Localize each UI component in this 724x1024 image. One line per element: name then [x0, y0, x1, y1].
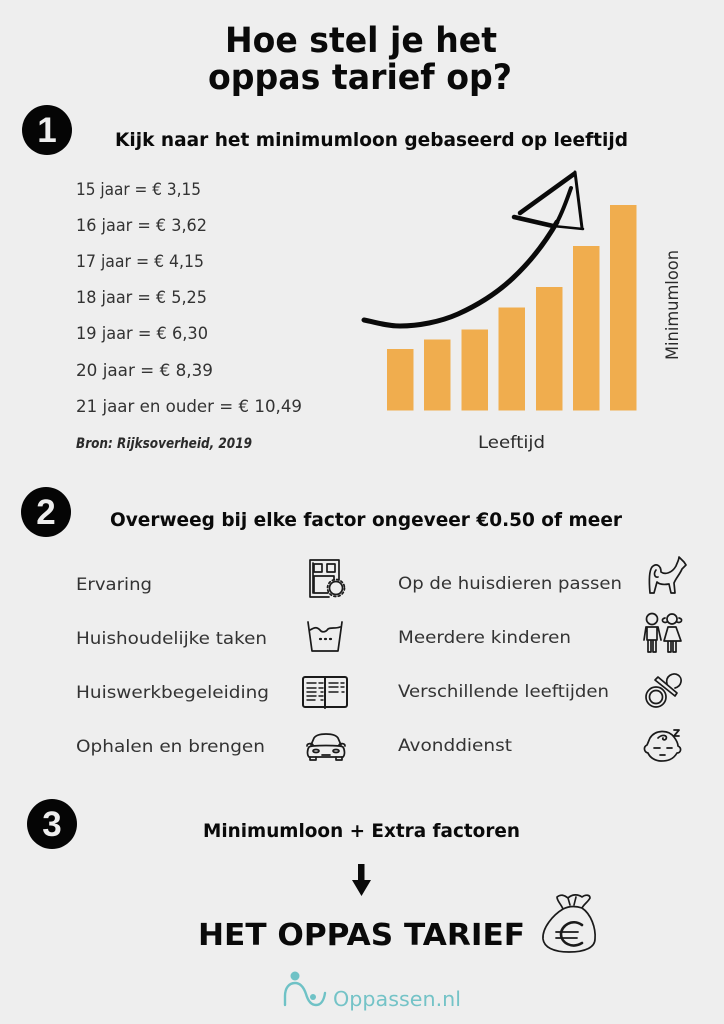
icon: dog	[649, 557, 686, 593]
step 2 badge	[21, 487, 71, 537]
factors right column: Verschillende leeftijden	[398, 682, 609, 702]
minimum wage list: 21 jaar en ouder = € 10,49	[76, 397, 302, 417]
icon: sleeping baby	[644, 730, 681, 761]
factors right column: Avonddienst	[398, 736, 512, 756]
logo: Oppassen.nl	[285, 972, 461, 1011]
minimum wage list: 18 jaar = € 5,25	[76, 288, 207, 308]
factors right column: Meerdere kinderen	[398, 628, 571, 648]
icon: pacifier	[646, 674, 681, 707]
result heading: HET OPPAS TARIEF	[198, 918, 525, 953]
step 1 heading: Kijk naar het minimumloon gebaseerd op leeftijd	[115, 129, 628, 151]
logo: Oppassen.nl: Oppassen.nl	[333, 987, 461, 1011]
minimum wage list: 15 jaar = € 3,15	[76, 180, 201, 200]
factors left column	[76, 575, 269, 757]
minimum wage list: 20 jaar = € 8,39	[76, 361, 213, 381]
step 3 heading: Minimumloon + Extra factoren	[203, 820, 520, 842]
factors right column: Op de huisdieren passen	[398, 574, 622, 594]
step 3 badge: 3	[42, 805, 62, 844]
minimum wage list: 17 jaar = € 4,15	[76, 252, 204, 272]
step 3 badge	[27, 799, 77, 849]
icon: open book	[303, 677, 347, 708]
arrow down	[352, 864, 371, 896]
factors right column	[398, 574, 622, 756]
source note: Bron: Rijksoverheid, 2019	[76, 436, 252, 452]
icon: experience	[310, 560, 344, 597]
title	[208, 21, 512, 98]
minimum wage list	[76, 180, 302, 417]
icon: money bag	[543, 895, 595, 952]
factors left column: Ophalen en brengen	[76, 737, 265, 757]
icon: hand-drawn rising arrow	[364, 172, 583, 326]
step 1 badge	[22, 105, 72, 155]
factors left column: Ervaring	[76, 575, 152, 595]
minimum wage list: 16 jaar = € 3,62	[76, 216, 207, 236]
icon: car	[307, 734, 345, 760]
x axis label: Leeftijd	[478, 433, 545, 452]
bar chart	[387, 205, 636, 410]
step 2 heading: Overweeg bij elke factor ongeveer €0.50 of meer	[110, 509, 623, 531]
icon: laundry tub	[308, 622, 342, 651]
minimum wage list: 19 jaar = € 6,30	[76, 324, 208, 344]
factors left column: Huishoudelijke taken	[76, 629, 267, 649]
title: oppas tarief op?	[208, 58, 512, 98]
icon: two children	[644, 614, 682, 652]
step 1 badge: 1	[37, 111, 57, 150]
title: Hoe stel je het	[225, 21, 497, 61]
factors left column: Huiswerkbegeleiding	[76, 683, 269, 703]
step 2 badge: 2	[36, 493, 56, 532]
y axis label: Minimumloon	[663, 250, 682, 360]
